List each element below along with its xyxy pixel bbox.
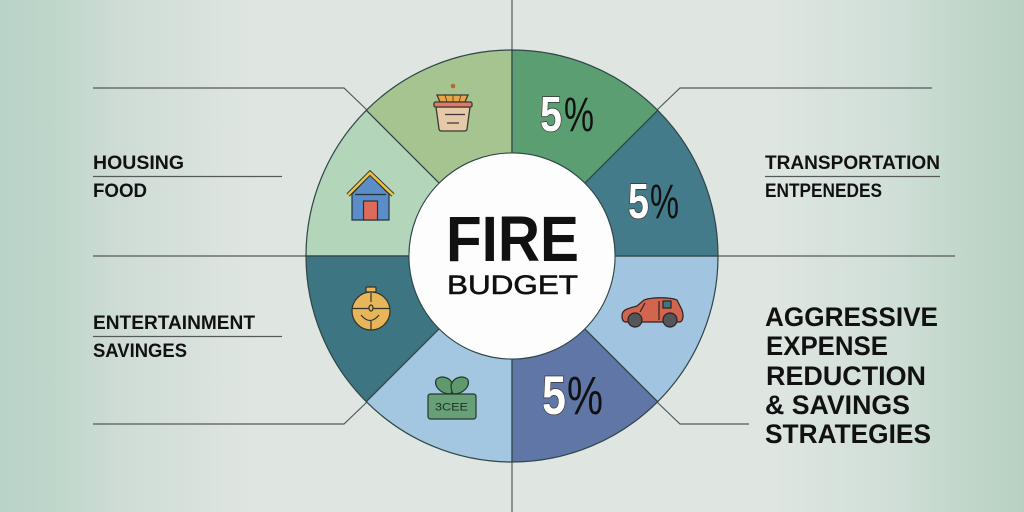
segment: top left olive bbox=[366, 50, 512, 183]
percentage: right upper: 5 bbox=[628, 175, 649, 229]
label: TRANSPORTATION: TRANSPORTATION bbox=[765, 153, 940, 174]
segment: left upper light green bbox=[306, 110, 439, 256]
segment: right upper teal bbox=[585, 110, 718, 256]
icon: savings box with leaves: 3CEE bbox=[435, 402, 468, 414]
segment: top right green bbox=[512, 50, 658, 183]
segment: right lower light blue bbox=[585, 256, 718, 402]
strategy text block: EXPENSE bbox=[766, 331, 888, 361]
icon: piggy face coin bbox=[352, 287, 390, 330]
segment: bottom left light blue bbox=[366, 329, 512, 462]
segment: bottom right indigo bbox=[512, 329, 658, 462]
label: FOOD: FOOD bbox=[93, 181, 147, 202]
strategy text block bbox=[765, 302, 938, 449]
label: ENTPENEDES: ENTPENEDES bbox=[765, 181, 882, 202]
label: SAVINGES: SAVINGES bbox=[93, 341, 187, 362]
strategy text block: & SAVINGS bbox=[765, 390, 910, 420]
percentage: bottom right: 5 bbox=[542, 364, 566, 426]
percentage: top right: 5 bbox=[540, 88, 562, 142]
segment: left lower dark teal bbox=[306, 256, 439, 402]
icon: food pot bbox=[434, 84, 472, 131]
strategy text block: STRATEGIES bbox=[765, 419, 931, 449]
title: FIRE: FIRE bbox=[446, 203, 579, 275]
strategy text block: AGGRESSIVE bbox=[765, 302, 938, 332]
center circle bbox=[409, 153, 615, 359]
percentage: bottom right: % bbox=[567, 366, 603, 426]
percentage: right upper: % bbox=[650, 176, 679, 229]
icon: savings box with leaves bbox=[428, 377, 476, 419]
donut chart bbox=[306, 50, 718, 462]
label: ENTERTAINMENT: ENTERTAINMENT bbox=[93, 313, 255, 334]
percentage: bottom right bbox=[542, 364, 603, 426]
label: HOUSING: HOUSING bbox=[93, 153, 184, 174]
strategy text block: REDUCTION bbox=[766, 361, 926, 391]
percentage: right upper bbox=[628, 175, 679, 229]
percentage: top right bbox=[540, 88, 594, 142]
percentage: top right: % bbox=[564, 89, 594, 142]
subtitle: BUDGET: BUDGET bbox=[447, 270, 578, 300]
icon: car bbox=[622, 298, 683, 327]
icon: house bbox=[348, 173, 393, 220]
